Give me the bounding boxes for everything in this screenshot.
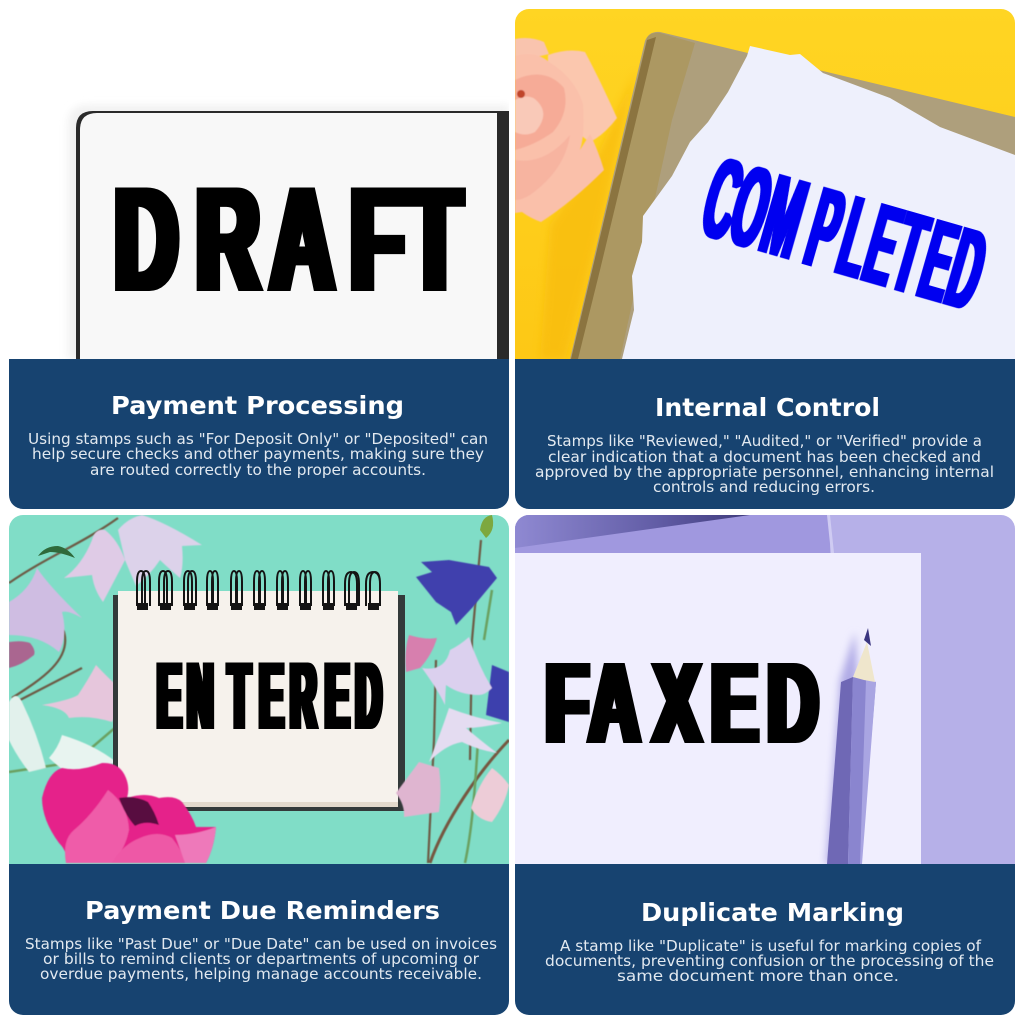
stems (9, 518, 509, 863)
stamp word: COMPLETED: COMPLETED (690, 134, 998, 335)
caption: payment processing: are routed correctly to the proper accounts. (90, 461, 426, 479)
torn white paper (622, 46, 1015, 359)
notebook back (113, 595, 405, 811)
caption: payment due reminders: Payment Due Reminders (85, 896, 440, 925)
white paper (515, 553, 921, 864)
stamp word: ENTERED: ENTERED (157, 645, 381, 749)
photo: completed stamp on torn paper (515, 9, 1015, 359)
stone book cover (570, 32, 1015, 359)
caption: duplicate marking: Duplicate Marking (641, 898, 904, 927)
leaves (38, 546, 75, 558)
caption: payment due reminders: or bills to remind clients or departments of upcoming or (43, 950, 480, 968)
icon: rose (515, 38, 617, 222)
panel: payment processing (9, 106, 509, 509)
photo: draft stamp on notebook (69, 106, 509, 359)
panel: internal control (515, 9, 1015, 509)
caption: internal control: Internal Control (655, 393, 880, 422)
peony (42, 763, 216, 863)
caption: internal control: Stamps like "Reviewed," "Audited," or "Verified" provide a (547, 432, 982, 450)
stamp word: DRAFT: DRAFT (115, 157, 462, 321)
stamp word: FAXED: FAXED (546, 640, 818, 766)
notebook page (118, 591, 398, 807)
flowers right (396, 560, 509, 822)
caption: duplicate marking: same document more than once. (617, 967, 899, 985)
caption: payment processing: Payment Processing (111, 391, 404, 420)
caption: duplicate marking: documents, preventing confusion or the processing of the (545, 952, 994, 970)
caption: internal control: controls and reducing errors. (653, 478, 875, 496)
caption: payment processing: help secure checks and other payments, making sure they (32, 445, 484, 463)
caption: duplicate marking (515, 864, 1015, 1015)
flowers left (9, 515, 202, 782)
caption: payment due reminders (9, 864, 509, 1015)
photo: entered stamp on spiral notebook with flowers (9, 515, 509, 865)
caption: payment processing: Using stamps such as "For Deposit Only" or "Deposited" can (28, 430, 488, 448)
caption: duplicate marking: A stamp like "Duplicate" is useful for marking copies of (560, 937, 982, 955)
photo: faxed stamp on paper with pencil (515, 515, 1015, 865)
caption: internal control: approved by the appropriate personnel, enhancing internal (535, 463, 994, 481)
panel: payment due reminders (9, 515, 509, 1015)
icon: pencil (826, 628, 876, 864)
caption: payment due reminders: Stamps like "Past Due" or "Due Date" can be used on invoices (25, 935, 497, 953)
caption: payment processing (9, 359, 509, 509)
panel: duplicate marking (515, 515, 1015, 1015)
caption: payment due reminders: overdue payments, helping manage accounts receivable. (40, 965, 482, 983)
caption: internal control (515, 359, 1015, 509)
caption: internal control: clear indication that a document has been checked and (548, 448, 981, 466)
spiral binding (137, 571, 380, 610)
